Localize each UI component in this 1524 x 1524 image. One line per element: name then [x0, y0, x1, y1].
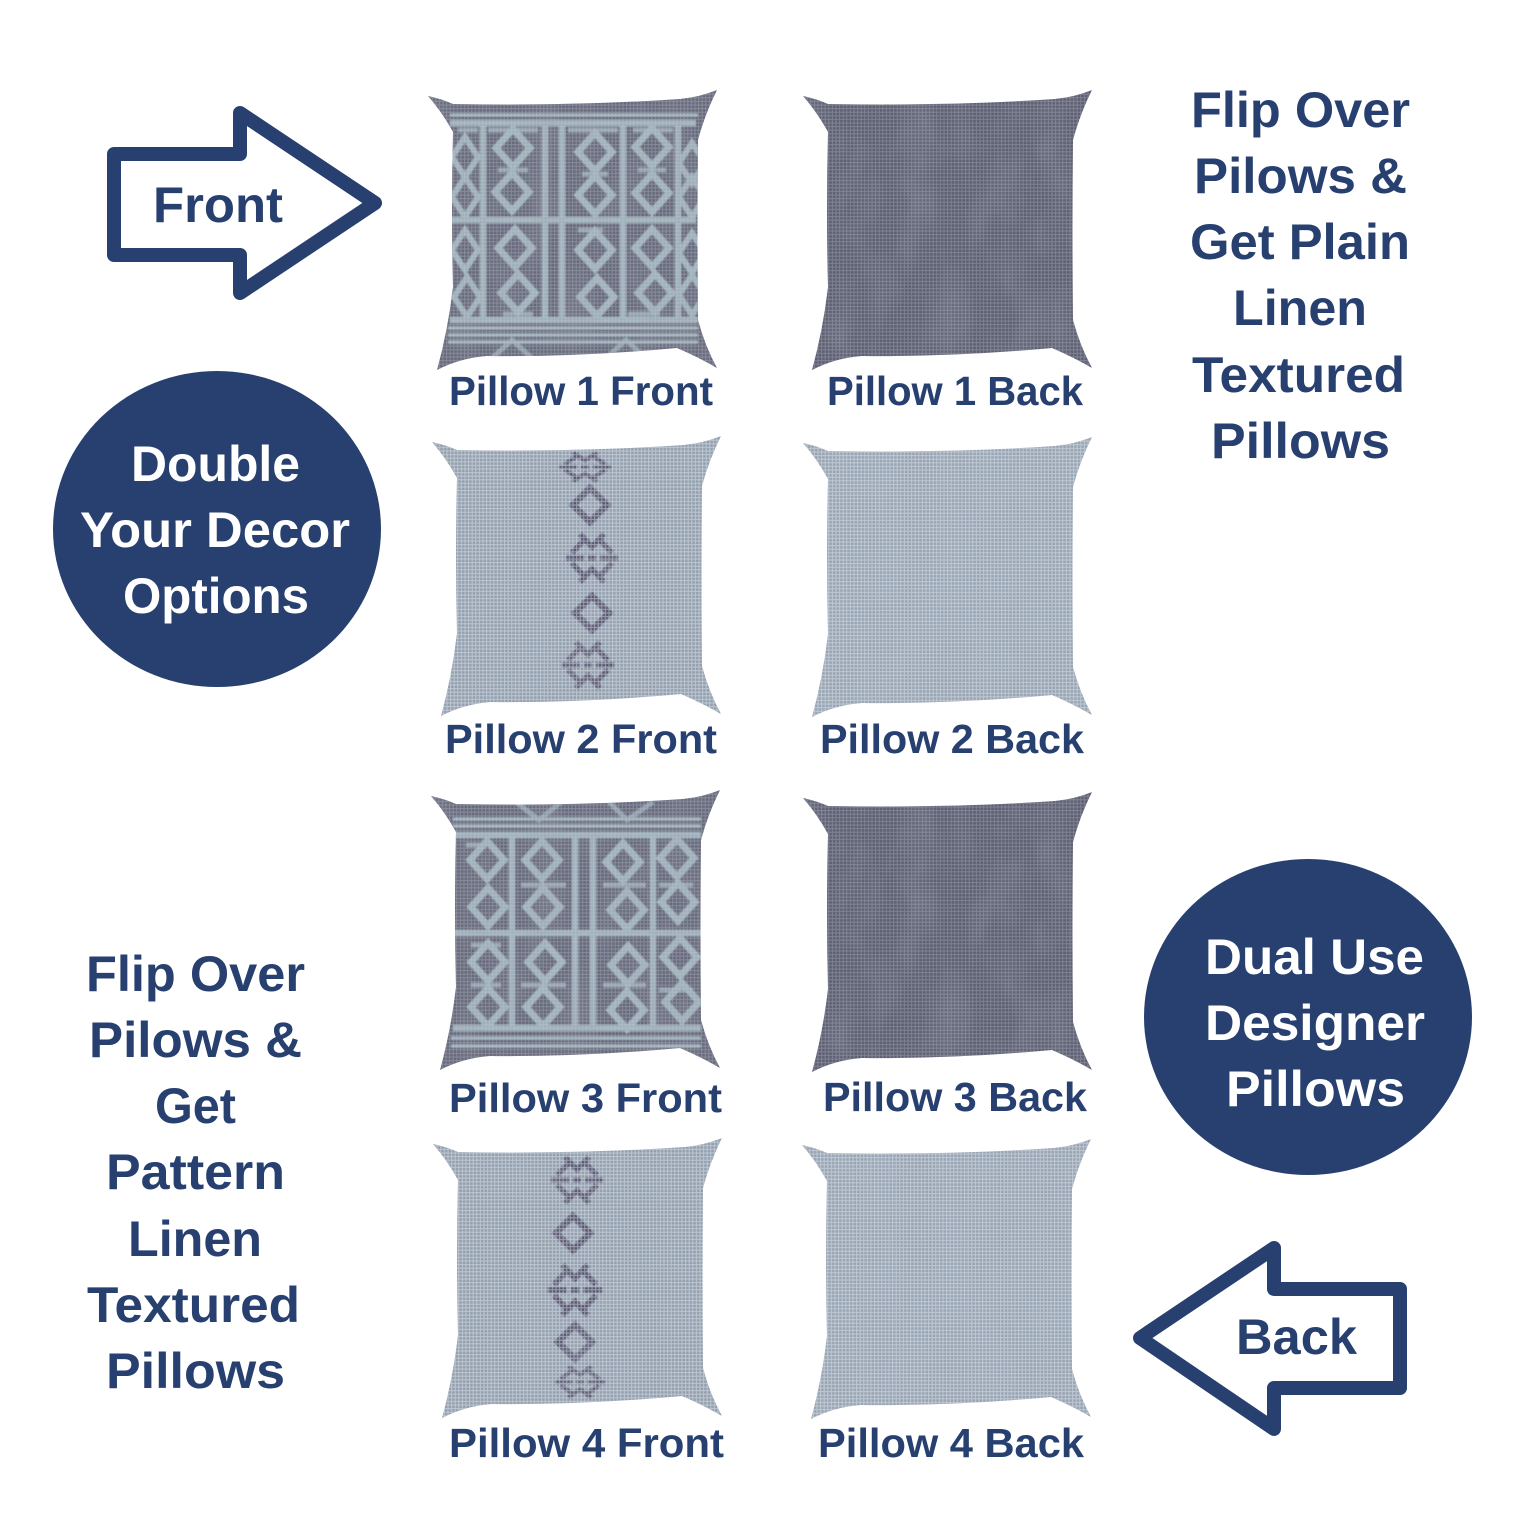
text: flip over to plain: Linen — [1233, 280, 1367, 336]
pillow 1 back — [803, 90, 1093, 370]
text: flip over to pattern: Pilows & — [89, 1012, 302, 1068]
caption: Pillow 2 Front: Pillow 2 Front — [445, 716, 717, 762]
caption: Pillow 3 Back: Pillow 3 Back — [823, 1074, 1087, 1120]
text: flip over to plain: Flip Over — [1191, 82, 1410, 138]
caption: Pillow 4 Back: Pillow 4 Back — [818, 1420, 1084, 1466]
arrow: Front — [114, 113, 375, 293]
pillow 3 back — [803, 792, 1093, 1072]
pillow 1 front — [428, 90, 718, 370]
badge: Dual Use Designer Pillows: Pillows — [1226, 1061, 1405, 1117]
pillow 2 back — [803, 437, 1093, 717]
pillow 4 back — [802, 1139, 1092, 1419]
pillow 3 front — [431, 790, 721, 1070]
badge: Double Your Decor Options: Your Decor — [80, 502, 350, 558]
badge: Dual Use Designer Pillows: Dual Use — [1205, 929, 1424, 985]
caption: Pillow 2 Back: Pillow 2 Back — [820, 716, 1084, 762]
label: Back: Back — [1236, 1309, 1357, 1365]
pillow 2 front — [432, 436, 722, 716]
badge: Dual Use Designer Pillows — [1144, 859, 1472, 1175]
text: flip over to pattern: Textured — [87, 1277, 300, 1333]
label: Front: Front — [153, 177, 283, 233]
badge: Double Your Decor Options — [53, 371, 381, 687]
badge: Double Your Decor Options: Options — [123, 568, 309, 624]
badge: Double Your Decor Options: Double — [131, 436, 300, 492]
text: flip over to plain: Pillows — [1211, 413, 1390, 469]
caption: Pillow 1 Front: Pillow 1 Front — [449, 368, 713, 414]
text: flip over to pattern: Pattern — [106, 1144, 285, 1200]
caption: Pillow 1 Back: Pillow 1 Back — [827, 368, 1083, 414]
text: flip over to plain: Get Plain — [1190, 214, 1410, 270]
badge: Dual Use Designer Pillows: Designer — [1205, 995, 1425, 1051]
text: flip over to pattern: Pillows — [106, 1343, 285, 1399]
text: flip over to plain: Textured — [1192, 347, 1405, 403]
arrow: Back — [1140, 1248, 1400, 1429]
text: flip over to pattern: Linen — [128, 1211, 262, 1267]
caption: Pillow 3 Front: Pillow 3 Front — [449, 1075, 722, 1121]
text: flip over to plain: Pilows & — [1194, 148, 1407, 204]
text: flip over to pattern: Flip Over — [86, 946, 305, 1002]
text: flip over to pattern: Get — [155, 1078, 236, 1134]
text: flip over to plain — [1190, 82, 1410, 469]
pillow 4 front — [433, 1138, 723, 1418]
caption: Pillow 4 Front: Pillow 4 Front — [449, 1420, 724, 1466]
text: flip over to pattern — [86, 946, 305, 1399]
